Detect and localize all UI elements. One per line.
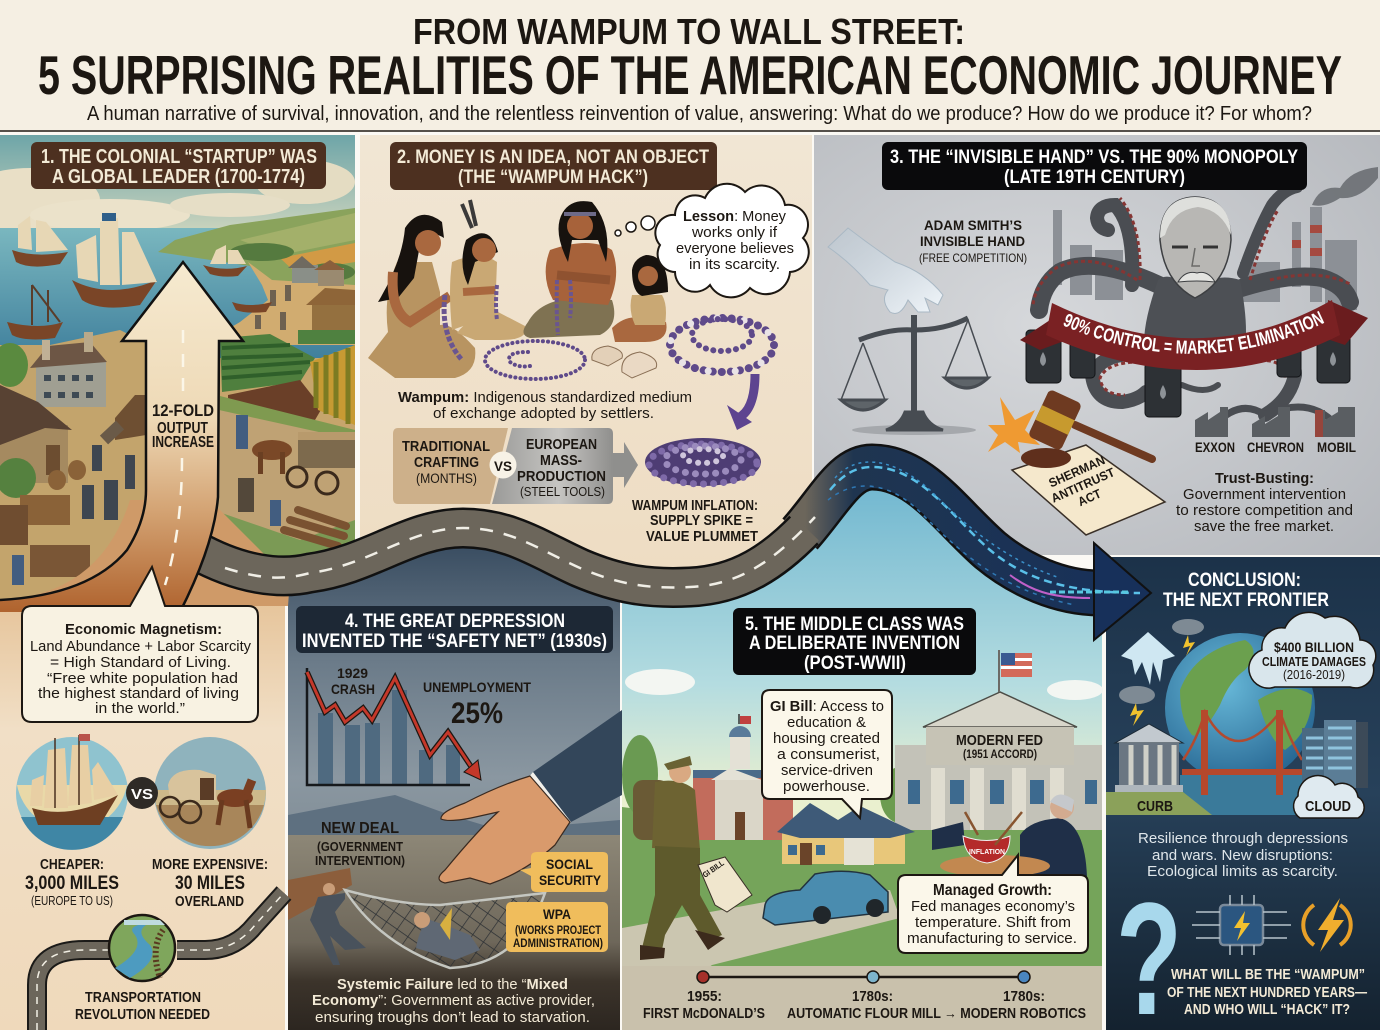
icon: vs badge: VS [131,786,153,803]
village [36,362,106,407]
panel title: middle class: (POST-WWII) [804,653,906,674]
callout: climate damages: $400 BILLION [1274,639,1354,655]
soldier [633,756,752,960]
car [763,871,888,925]
text: closing question [1167,967,1367,1018]
text: resilience: Ecological limits as scarcity. [1147,863,1338,880]
text: wampum inflation [632,498,758,545]
panel title: great depression [296,606,613,653]
bar and line chart: 25% [451,697,503,730]
panel title: invisible hand: 3. THE “INVISIBLE HAND” VS. THE 90% MONOPOLY [890,146,1298,168]
text: trust-busting: Trust-Busting: [1215,470,1314,487]
icon: gavel and sherman act: ANTITRUST [1049,465,1117,506]
callout: climate damages [1249,612,1376,688]
label: social security: SOCIAL [546,856,593,872]
comparison: traditional vs european [393,428,638,504]
icon: gi bill scroll: GI BILL [701,858,726,880]
text: cheaper: 3,000 MILES [25,873,119,894]
comparison: traditional vs european: CRAFTING [414,455,479,471]
text: adam smith: (FREE COMPETITION) [919,251,1027,265]
fed chair and inflation bowl: INFLATION [969,847,1005,856]
panel: invisible hand vs monopoly [814,135,1380,555]
text: cheaper: (EUROPE TO US) [31,894,113,908]
panel title: middle class: A DELIBERATE INVENTION [749,633,960,654]
text: more expensive: 30 MILES [175,873,245,894]
ships [7,250,272,339]
label: new deal: (GOVERNMENT [317,839,403,854]
small factories [1195,407,1355,437]
company labels: EXXON [1195,439,1235,455]
callout: economic magnetism: Economic Magnetism: [65,622,222,638]
icon: vs badge [126,777,158,809]
company labels: MOBIL [1317,439,1356,455]
arrow: 12-fold output increase: 12-FOLD [152,401,214,420]
necklace [670,318,774,372]
text: wampum definition: of exchange adopted by settlers. [433,405,654,422]
text: closing question: AND WHO WILL “HACK” IT? [1184,1002,1350,1018]
heading: conclusion [1163,569,1329,611]
icon: energy bolt [1303,898,1351,952]
arrow: 12-fold output increase: OUTPUT [157,420,208,437]
thought bubble: lesson: works only if [691,225,778,241]
icon: chip [1192,895,1291,955]
heading: conclusion: THE NEXT FRONTIER [1163,589,1329,611]
timeline: FIRST McDONALD’S [643,1006,765,1022]
callout: gi bill: education & [787,714,866,731]
beads on ground [485,341,585,379]
callout: managed growth: Fed manages economy’s [911,898,1075,915]
text: systemic failure: ensuring troughs don’t lead to starvation. [315,1010,590,1026]
callout: managed growth [898,855,1088,953]
arrow base: orange fill under road [0,500,290,606]
label: curb [1106,792,1212,815]
bar and line chart: CRASH [331,681,375,697]
callout: climate damages: (2016-2019) [1283,668,1345,682]
comparison: traditional vs european: (STEEL TOOLS) [520,485,605,499]
callout: managed growth: temperature. Shift from [915,914,1071,931]
callout: economic magnetism: = High Standard of Living. [50,655,231,671]
label: cloud [1294,776,1364,818]
fed chair and inflation bowl [932,794,1087,877]
fed building [895,650,1102,830]
callout: economic magnetism [22,567,258,722]
callout: economic magnetism: Land Abundance + Labor Scarcity [30,639,252,655]
text: trust-busting [1176,470,1353,535]
bar and line chart: 1929 [337,665,368,681]
icon: gavel and sherman act: ACT [1076,486,1104,509]
panel title: colonial startup: A GLOBAL LEADER (1700-1774) [52,166,305,188]
callout: managed growth: Managed Growth: [933,882,1052,899]
callout: economic magnetism: in the world.” [95,701,185,717]
text: more expensive: OVERLAND [175,894,244,910]
icon: gavel and sherman act [988,389,1165,535]
bead pile [645,438,761,486]
comparison: traditional vs european: PRODUCTION [517,469,606,485]
road: transportation [37,893,284,1030]
callout: economic magnetism: the highest standard of living [38,686,239,702]
panel title: money is an idea [390,142,717,190]
text: trust-busting: to restore competition and [1176,502,1353,519]
text: resilience: and wars. New disruptions: [1152,847,1333,864]
face [1160,197,1231,298]
panel title: colonial startup [31,142,326,189]
label: social security [520,852,608,892]
thought bubble: lesson: in its scarcity. [689,257,780,273]
icon: wagon circle [154,737,266,849]
bar and line chart [307,665,531,785]
house [777,803,915,865]
thought bubble: lesson [615,184,809,297]
label: social security: SECURITY [539,872,602,888]
panel title: middle class: 5. THE MIDDLE CLASS WAS [745,614,964,635]
text: wampum inflation: WAMPUM INFLATION: [632,498,758,514]
text: cheaper [25,857,119,908]
comparison: traditional vs european: VS [494,458,512,474]
text: resilience: Resilience through depressions [1138,830,1348,847]
timeline: AUTOMATIC FLOUR MILL → MODERN ROBOTICS [787,1006,1086,1022]
label: new deal: INTERVENTION) [315,853,405,868]
callout: gi bill: housing created [773,730,880,747]
text: wampum inflation: VALUE PLUMMET [646,529,758,545]
comparison: traditional vs european: EUROPEAN [526,437,597,453]
text: transportation revolution: TRANSPORTATION [85,990,201,1006]
text: cheaper: CHEAPER: [40,857,104,873]
callout: economic magnetism: “Free white population had [47,671,238,687]
barrels [1026,330,1350,417]
text: trust-busting: Government intervention [1183,486,1346,503]
panel title: great depression: INVENTED THE “SAFETY NET” (1930s) [302,631,607,652]
panel title: money is an idea: (THE “WAMPUM HACK”) [458,166,648,188]
label: new deal [315,820,405,868]
text: transportation revolution: REVOLUTION NEEDED [75,1007,210,1023]
company labels: CHEVRON [1247,439,1304,455]
icon: gavel and sherman act: SHERMAN [1047,453,1107,490]
octopus [1039,187,1350,425]
text: systemic failure [312,977,595,1026]
icon: scales [841,315,988,435]
company labels [1195,439,1356,455]
timeline: 1780s: [1003,989,1045,1005]
title: FROM WAMPUM TO WALL STREET: [413,11,965,52]
text: systemic failure: Systemic Failure led to the “Mixed [337,977,568,993]
callout: gi bill: powerhouse. [783,778,870,795]
callout: gi bill: GI Bill: Access to [770,698,884,715]
label: wpa [506,902,608,952]
text: resilience [1138,830,1348,880]
icon: ship circle [16,734,128,850]
arrow: 12-fold output increase: INCREASE [152,434,214,451]
text: adam smith [919,217,1027,265]
label: wpa: WPA [543,906,571,922]
panel title: invisible hand: (LATE 19TH CENTURY) [1004,166,1185,188]
text: more expensive: MORE EXPENSIVE: [152,857,268,873]
icon: ice and storm clouds [1119,619,1204,726]
text: transportation revolution [75,990,210,1023]
label: new deal: NEW DEAL [321,820,399,837]
panel: money is an idea [360,135,812,590]
icon: globe [1165,633,1315,783]
trees [622,735,658,815]
text: wampum definition: Wampum: Indigenous standardized medium [398,389,692,406]
comparison: traditional vs european: MASS- [540,453,582,469]
text: wampum definition [398,389,692,422]
label: wpa: ADMINISTRATION) [513,938,603,950]
text: adam smith: INVISIBLE HAND [920,233,1025,249]
panel title: great depression: 4. THE GREAT DEPRESSION [345,611,565,632]
panel: left lower background [0,600,285,1030]
panel title: invisible hand [882,142,1307,190]
factories background [1053,207,1357,310]
icon: helping hand [439,710,622,884]
panel title: middle class [733,608,976,675]
college [693,714,793,840]
timeline [643,971,1086,1022]
fed building: MODERN FED [956,732,1043,749]
text: trust-busting: save the free market. [1194,518,1334,535]
comparison: traditional vs european: (MONTHS) [416,471,477,486]
panel: middle class [622,467,1103,1030]
thought bubble: lesson: Lesson: Money [683,209,787,225]
panel title: money is an idea: 2. MONEY IS AN IDEA, NOT AN OBJECT [397,146,709,168]
thought bubble: lesson: everyone believes [676,241,794,257]
header background [0,0,1380,131]
panel: conclusion [1106,557,1380,1030]
label: wpa: (WORKS PROJECT [515,925,601,937]
panel: colonial startup [0,135,355,605]
label: curb: CURB [1137,798,1173,815]
text: systemic failure: Economy”: Government as active provider, [312,993,595,1009]
ribbon [1020,300,1368,370]
title [38,11,1342,106]
fed building: (1951 ACCORD) [963,749,1037,761]
comparison: traditional vs european: TRADITIONAL [402,439,490,455]
panel title: colonial startup: 1. THE COLONIAL “STARTUP” WAS [41,146,317,168]
text: more expensive [152,857,268,910]
arrow: 12-fold output increase [0,262,243,612]
icon: gi bill scroll [698,857,752,912]
timeline: 1780s: [852,989,893,1005]
text: wampum inflation: SUPPLY SPIKE = [650,513,753,529]
callout: managed growth: manufacturing to service. [907,930,1077,947]
wagon [298,438,355,468]
arrow: timeline road [195,462,1151,640]
icon: bridge and skyline [1115,710,1368,815]
heading: conclusion: CONCLUSION: [1188,569,1301,591]
callout: gi bill: a consumerist, [777,746,880,763]
icon: safety net [345,890,545,968]
callout: gi bill [762,690,892,818]
bar and line chart: UNEMPLOYMENT [423,679,531,695]
figures: wampum makers [368,200,668,378]
icon: invisible hand [828,228,943,314]
logs [284,510,346,546]
panel: great depression [288,528,622,1030]
ribbon: 90% CONTROL = MARKET ELIMINATION [1064,311,1324,354]
timeline: 1955: [687,989,722,1005]
text: adam smith: ADAM SMITH’S [924,217,1022,233]
figure: man pulling net [310,883,366,965]
label: cloud: CLOUD [1305,798,1351,815]
callout: gi bill: service-driven [781,762,873,779]
